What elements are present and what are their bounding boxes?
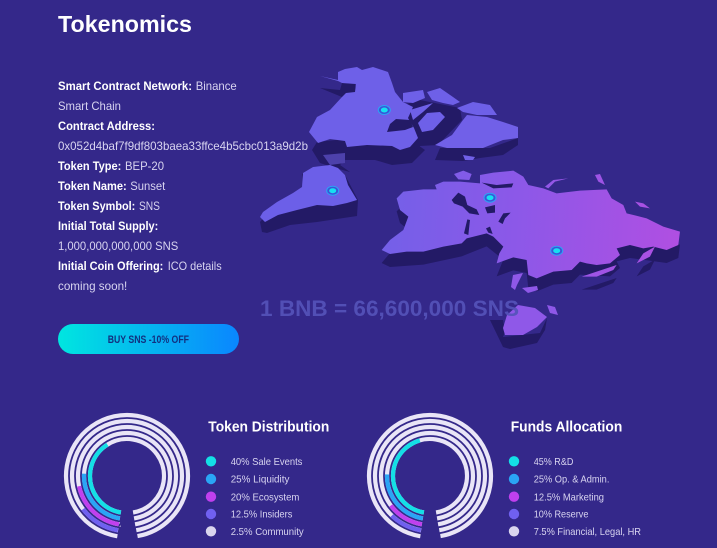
legend: funds allocation (509, 456, 641, 538)
map land: greenland (435, 115, 518, 160)
buy button (58, 324, 239, 354)
contract address: Contract Address: (58, 119, 155, 133)
heading: funds allocation: Funds Allocation (511, 420, 622, 436)
map land: north america (309, 67, 497, 150)
title: Tokenomics (58, 11, 192, 37)
legend item: r&d: 45% R&D (534, 456, 574, 468)
legend: token distribution (206, 456, 304, 538)
map pin: south america (327, 186, 339, 195)
legend item: reserve: 10% Reserve (534, 509, 589, 521)
legend item: insiders: 12.5% Insiders (231, 509, 292, 521)
heading: token distribution: Token Distribution (208, 420, 329, 436)
contract address (58, 119, 308, 153)
map land: southeast asia islands and australia (503, 273, 558, 335)
initial coin offering (58, 259, 222, 293)
token details text block (58, 79, 308, 293)
exchange rate text: 1 BNB = 66,600,000 SNS (260, 296, 519, 321)
token name: Sunset (130, 179, 166, 193)
legend item: financial, legal, hr: 7.5% Financial, Legal, HR (534, 526, 641, 538)
initial total supply: 1,000,000,000,000 SNS (58, 239, 178, 253)
initial coin offering: coming soon! (58, 279, 127, 293)
buy button: BUY SNS -10% OFF (108, 334, 189, 346)
donut chart: token distribution (57, 406, 197, 546)
map shadow: eurasia, africa and australia (382, 184, 680, 291)
initial coin offering: ICO details (168, 259, 222, 273)
initial total supply (58, 219, 178, 253)
token name (58, 179, 166, 193)
token symbol: Token Symbol: (58, 199, 135, 213)
legend item: community: 2.5% Community (231, 526, 304, 538)
token name: Token Name: (58, 179, 127, 193)
contract address: 0x052d4baf7f9df803baea33ffce4b5cbc013a9d2b (58, 139, 308, 153)
map shadow: north america and greenland (312, 83, 518, 172)
initial total supply: Initial Total Supply: (58, 219, 158, 233)
map land: eurasia and africa (382, 171, 680, 278)
map hole: hudson bay (387, 119, 413, 132)
map land: south america (260, 165, 357, 222)
smart contract network: Smart Chain (58, 99, 121, 113)
smart contract network: Smart Contract Network: (58, 79, 192, 93)
donut chart: funds allocation (360, 406, 500, 546)
smart contract network (58, 79, 237, 113)
token type: Token Type: (58, 159, 121, 173)
legend item: sale events: 40% Sale Events (231, 456, 302, 468)
map pin: north america (378, 106, 390, 114)
token type (58, 159, 164, 173)
map holes: inland seas (452, 183, 513, 235)
legend item: operations and admin: 25% Op. & Admin. (534, 474, 609, 486)
map pin: asia (551, 246, 563, 255)
map shadow: south america (260, 165, 358, 233)
legend item: ecosystem: 20% Ecosystem (231, 491, 300, 503)
token type: BEP-20 (125, 159, 164, 173)
world map (260, 67, 680, 349)
map land: central america (323, 153, 345, 165)
legend item: liquidity: 25% Liquidity (231, 474, 290, 486)
initial coin offering: Initial Coin Offering: (58, 259, 163, 273)
map pin: europe (484, 193, 496, 202)
map shadow: australia (490, 318, 547, 349)
token symbol: SNS (139, 199, 160, 213)
smart contract network: Binance (196, 79, 237, 93)
legend item: marketing: 12.5% Marketing (534, 491, 604, 503)
